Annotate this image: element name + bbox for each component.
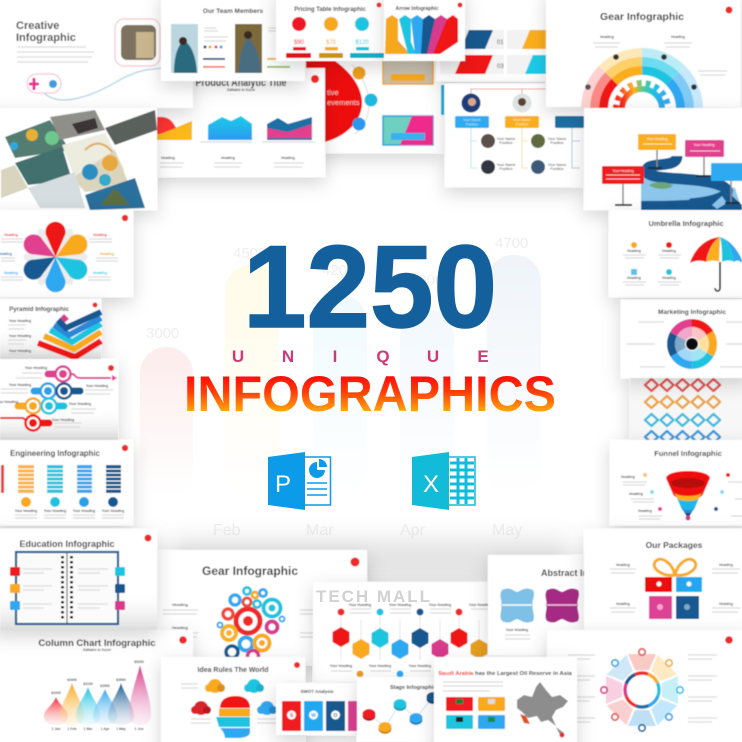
panel: engineering infographic: Your Heading: [44, 509, 66, 513]
faint background column chart: Apr: [400, 522, 426, 539]
panel: funnel infographic: [610, 440, 742, 525]
panel: column chart infographic: $5200: [134, 660, 144, 664]
panel: path infographic: Your Heading: [52, 418, 74, 422]
panel: creative infographic: [0, 0, 193, 108]
panel: numbered parallelograms: 03: [497, 64, 504, 70]
panel: hexagon timeline: [313, 582, 491, 682]
panel: education infographic: [0, 529, 157, 630]
panel: funnel infographic: Funnel Infographic: [654, 449, 722, 458]
panel: arrow infographic: Arrow Infographic: [395, 6, 439, 12]
subtitle: unique: U: [427, 347, 439, 366]
panel: flower infographic: Heading: [4, 271, 18, 275]
panel: river road signs: Your Heading: [693, 143, 715, 147]
panel: creative achievements: tive: [327, 88, 339, 97]
panel: funnel infographic: Heading: [638, 509, 652, 513]
panel: organization chart: Your Name: [497, 163, 515, 167]
faint background column chart: Mar: [306, 522, 334, 539]
panel: column chart infographic: 1 Feb: [67, 727, 77, 731]
panel: pyramid infographic: Your Heading: [9, 349, 31, 353]
panel: organization chart: Your Name: [463, 118, 481, 122]
title: 1250: 1250: [243, 221, 497, 352]
panel: pricing table: $120: [355, 40, 369, 46]
panel: swot analysis: [276, 683, 357, 735]
panel: swot analysis: O: [334, 713, 338, 719]
panel: hexagon timeline: Your Heading: [409, 664, 431, 668]
panel: column chart infographic: Editable in Excel: [83, 648, 111, 652]
subtitle: unique: I: [333, 347, 337, 366]
panel: circular puzzle infographic: [547, 630, 742, 742]
panel: gear head infographic: Heading: [172, 625, 188, 630]
title: infographics: INFOGRAPHICS: [184, 366, 556, 422]
panel: gear semicircle: Heading: [600, 35, 614, 39]
panel: swot analysis: S: [290, 713, 294, 719]
panel: numbered parallelograms: 01: [497, 40, 504, 46]
panel: organization chart: Position: [499, 167, 513, 171]
panel: umbrella infographic: Heading: [627, 276, 641, 280]
subtitle: unique: E: [477, 347, 489, 366]
panel: path infographic: Your Heading: [69, 402, 91, 406]
panel: engineering infographic: Your Heading: [102, 509, 124, 513]
panel: organization chart: Your Name: [548, 163, 566, 167]
panel: umbrella infographic: [609, 210, 742, 297]
faint background column chart: [140, 235, 541, 539]
panel: organization chart: Your Name: [497, 137, 515, 141]
panel: creative achievements: [305, 50, 444, 153]
panel: column chart infographic: 1 Apr: [101, 727, 110, 731]
panel: pyramid infographic: [0, 299, 101, 359]
faint background column chart: 3000: [146, 325, 179, 342]
panel: gear semicircle: Heading: [671, 35, 685, 39]
panel: hexagon timeline: Your Heading: [369, 664, 391, 668]
panel: flower infographic: [0, 210, 133, 297]
panel: flower infographic: Heading: [100, 252, 114, 256]
panel: numbered parallelograms: [436, 0, 577, 81]
icon: excel: [412, 452, 475, 510]
panel: column chart infographic: $3100: [83, 682, 93, 686]
panel: pricing table: Pricing Table Infographic: [294, 7, 366, 13]
faint background column chart: 4200: [322, 262, 355, 279]
panel: column chart infographic: 1 Jan: [52, 727, 60, 731]
faint background column chart: 3900: [410, 272, 443, 289]
panel: column chart infographic: $3500: [116, 678, 126, 682]
panel: saudi arabia oil reserve: [434, 657, 577, 742]
panel: pyramid infographic: Your Heading: [9, 319, 31, 323]
panel: creative infographic: Creative: [16, 20, 59, 32]
faint background column chart: May: [492, 522, 522, 539]
panel: umbrella infographic: Heading: [627, 249, 641, 253]
panel: diamond chain: [630, 378, 742, 443]
subtitle: unique: Q: [376, 347, 390, 366]
subtitle: unique: U: [232, 347, 244, 366]
panel: product analytic chart: [150, 68, 325, 177]
panel: column chart infographic: Column Chart Infographic: [38, 638, 156, 649]
panel: our packages: [584, 529, 742, 630]
panel: flower infographic: Heading: [93, 233, 107, 237]
panel: product analytic chart: Product Analytic Title: [196, 77, 286, 89]
panel: our packages: Heading: [719, 602, 733, 606]
panel: path infographic: Your Heading: [86, 384, 108, 388]
panel: organization chart: Position: [466, 122, 478, 126]
panel: path infographic: Your Heading: [25, 366, 47, 370]
panel: gear semicircle: Gear Infographic: [600, 11, 684, 23]
panel: numbered parallelograms: 04: [560, 64, 567, 70]
panel: arrow infographic: [376, 0, 465, 61]
panel: organization chart: Your Name: [513, 118, 531, 122]
panel: column chart infographic: 1 Mar: [83, 727, 93, 731]
panel: column chart infographic: 1 May: [116, 727, 126, 731]
panel: idea rules the world: [161, 657, 305, 742]
panel: organization chart: Position: [516, 122, 528, 126]
panel: gear head infographic: Heading: [172, 602, 188, 607]
icon: powerpoint: [268, 452, 330, 510]
panel: pricing table: [276, 0, 385, 61]
panel: education infographic: Education Infographic: [19, 539, 115, 549]
panel: funnel infographic: Heading: [629, 492, 643, 496]
watermark: tech mall: TECH MALL: [316, 587, 430, 606]
panel: river road signs: Your Heading: [646, 137, 668, 141]
panel: engineering infographic: Engineering Infographic: [10, 449, 100, 458]
panel: hexagon timeline: Your Heading: [330, 664, 352, 668]
panel: product analytic chart: Heading: [221, 156, 235, 160]
panel: organization chart: [445, 84, 584, 187]
panel: hexagon timeline: Your Heading: [469, 603, 491, 607]
panel: column chart infographic: [0, 630, 193, 742]
panel: marketing infographic: [621, 300, 742, 378]
panel: column chart infographic: $2200: [51, 691, 61, 695]
panel: hexagon timeline: Your Heading: [429, 603, 451, 607]
panel: engineering infographic: Your Heading: [73, 509, 95, 513]
faint background column chart: 4700: [495, 235, 528, 252]
panel: column chart infographic: $3400: [67, 678, 77, 682]
panel: stage infographic: Stage Infographic: [390, 685, 436, 691]
panel: swot analysis: SWOT Analysis: [300, 689, 334, 694]
panel: organization chart: Your Name: [548, 137, 566, 141]
panel: column chart infographic: $2900: [100, 684, 110, 688]
panel: pyramid infographic: Pyramid Infographic: [9, 306, 69, 313]
panel: organization chart: Position: [550, 141, 564, 145]
panel: numbered parallelograms: 02: [560, 40, 567, 46]
panel: path infographic: Your Heading: [9, 383, 31, 387]
panel: umbrella infographic: Heading: [662, 276, 676, 280]
panel: flower infographic: Heading: [4, 233, 18, 237]
panel: funnel infographic: Heading: [621, 475, 635, 479]
panel: product analytic chart: Heading: [161, 156, 175, 160]
panel: pricing table: $90: [294, 40, 305, 46]
panel: our packages: Heading: [719, 563, 733, 567]
panel: organization chart: Position: [499, 141, 513, 145]
panel: hexagon timeline: Your Heading: [349, 603, 371, 607]
panel: our team members: Our Team Members: [203, 8, 263, 15]
panel: umbrella infographic: Heading: [662, 249, 676, 253]
panel: product analytic chart: Editable in Excel: [227, 88, 255, 92]
panel: swot analysis: W: [311, 713, 316, 719]
panel: path infographic: [0, 359, 118, 440]
panel: our packages: Heading: [616, 563, 630, 567]
panel: saudi arabia oil reserve: Saudi Arabia has the Largest Oil Reserve in Asia: [438, 671, 573, 677]
subtitle: unique: [232, 347, 489, 366]
panel: our packages: Our Packages: [646, 540, 703, 550]
panel: product analytic chart: Heading: [281, 156, 295, 160]
panel: marketing infographic: Marketing Infographic: [658, 309, 726, 316]
faint background column chart: Feb: [213, 522, 241, 539]
panel: column chart infographic: 1 Jun: [134, 727, 144, 731]
faint background column chart: 4500: [233, 245, 266, 262]
panel: river road signs: Your Heading: [612, 169, 634, 173]
panel: idea rules the world: Idea Rules The World: [197, 667, 269, 674]
panel: abstract infographic: [488, 555, 588, 655]
panel: gear semicircle: [546, 0, 740, 166]
panel: organization chart: Position: [550, 167, 564, 171]
panel: river road signs: [584, 108, 742, 210]
panel: abstract infographic: Abstract In: [541, 568, 588, 578]
panel: engineering infographic: Your Heading: [15, 509, 37, 513]
panel: abstract infographic: Your Heading: [506, 628, 528, 632]
subtitle: unique: N: [282, 347, 294, 366]
panel: photo collage: [0, 108, 157, 210]
panel: creative infographic: Infographic: [16, 32, 76, 44]
panel: our team members: [161, 0, 305, 81]
panel: gear head infographic: [158, 550, 367, 665]
panel: umbrella infographic: Umbrella Infographic: [648, 219, 724, 228]
icon: powerpoint: P: [275, 471, 291, 498]
panel: pyramid infographic: Your Heading: [9, 334, 31, 338]
panel: our packages: Heading: [616, 602, 630, 606]
panel: creative achievements: evements: [327, 98, 360, 107]
panel: gear head infographic: Gear Infographic: [202, 564, 298, 578]
panel: engineering infographic: [0, 440, 133, 525]
panel: hexagon timeline: Your Heading: [389, 603, 411, 607]
icon: excel: X: [423, 471, 439, 498]
panel: stage infographic: [357, 677, 440, 742]
panel: pricing table: $75: [326, 40, 337, 46]
panel: flower infographic: Heading: [93, 271, 107, 275]
